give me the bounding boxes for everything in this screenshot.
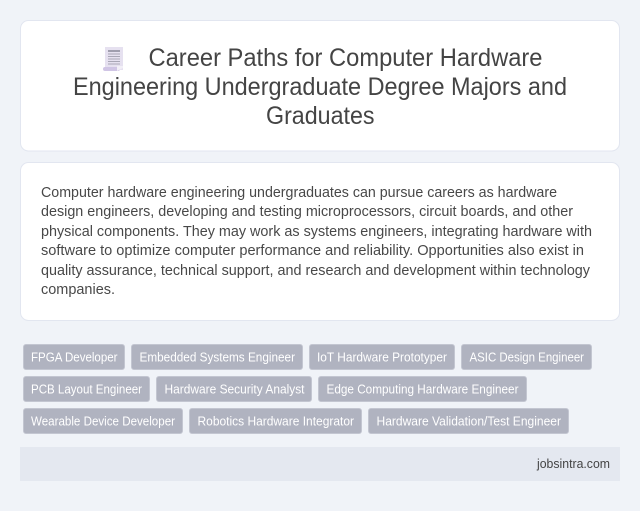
panel: title card [20,20,620,151]
icon: paper scroll [103,47,123,71]
tag: IoT Hardware Prototyper [310,344,454,370]
tag: Embedded Systems Engineer [132,344,302,370]
heading: Career Paths for Computer Hardware [148,44,542,72]
heading [73,44,567,130]
text block: description paragraph: design engineers, developing and testing microprocessors, circuit boards, and other [41,203,573,220]
tag: Robotics Hardware Integrator: Robotics Hardware Integrator [198,414,355,428]
tag: ASIC Design Engineer: ASIC Design Engineer [470,350,585,364]
text block: description paragraph: Computer hardware engineering undergraduates can pursue careers as hardware [41,184,557,201]
panel: description [20,162,620,320]
tag: IoT Hardware Prototyper: IoT Hardware Prototyper [317,350,448,364]
panel: career tags [24,344,592,434]
tag: PCB Layout Engineer: PCB Layout Engineer [31,382,143,396]
tag: Wearable Device Developer [24,408,182,434]
tag: Hardware Validation/Test Engineer: Hardware Validation/Test Engineer [376,414,562,428]
tag: ASIC Design Engineer [462,344,592,370]
text block: description paragraph: physical components. They may work as systems engineers, integrating hardware with [41,223,592,240]
text block: description paragraph: quality assurance, technical support, and research and development within technology [41,262,590,279]
tag: FPGA Developer: FPGA Developer [31,350,118,364]
text block: description paragraph [41,184,592,298]
tag: Edge Computing Hardware Engineer: Edge Computing Hardware Engineer [326,382,519,396]
tag: Hardware Security Analyst: Hardware Security Analyst [164,382,305,396]
tag: Wearable Device Developer: Wearable Device Developer [31,414,176,428]
tag: Edge Computing Hardware Engineer [318,376,526,402]
footer: jobsintra.com [536,457,610,471]
footer [20,447,620,481]
text block: description paragraph: software to optimize computer performance and reliability. Opportunities also exist in [41,242,584,259]
tag: Robotics Hardware Integrator [190,408,362,434]
tag: PCB Layout Engineer [24,376,150,402]
tag: Hardware Security Analyst [156,376,312,402]
tag: Embedded Systems Engineer: Embedded Systems Engineer [140,350,296,364]
heading: Graduates [266,102,374,130]
tag: Hardware Validation/Test Engineer [368,408,568,434]
text block: description paragraph: companies. [41,281,115,298]
heading: Engineering Undergraduate Degree Majors and [73,73,567,101]
tag: FPGA Developer [24,344,124,370]
